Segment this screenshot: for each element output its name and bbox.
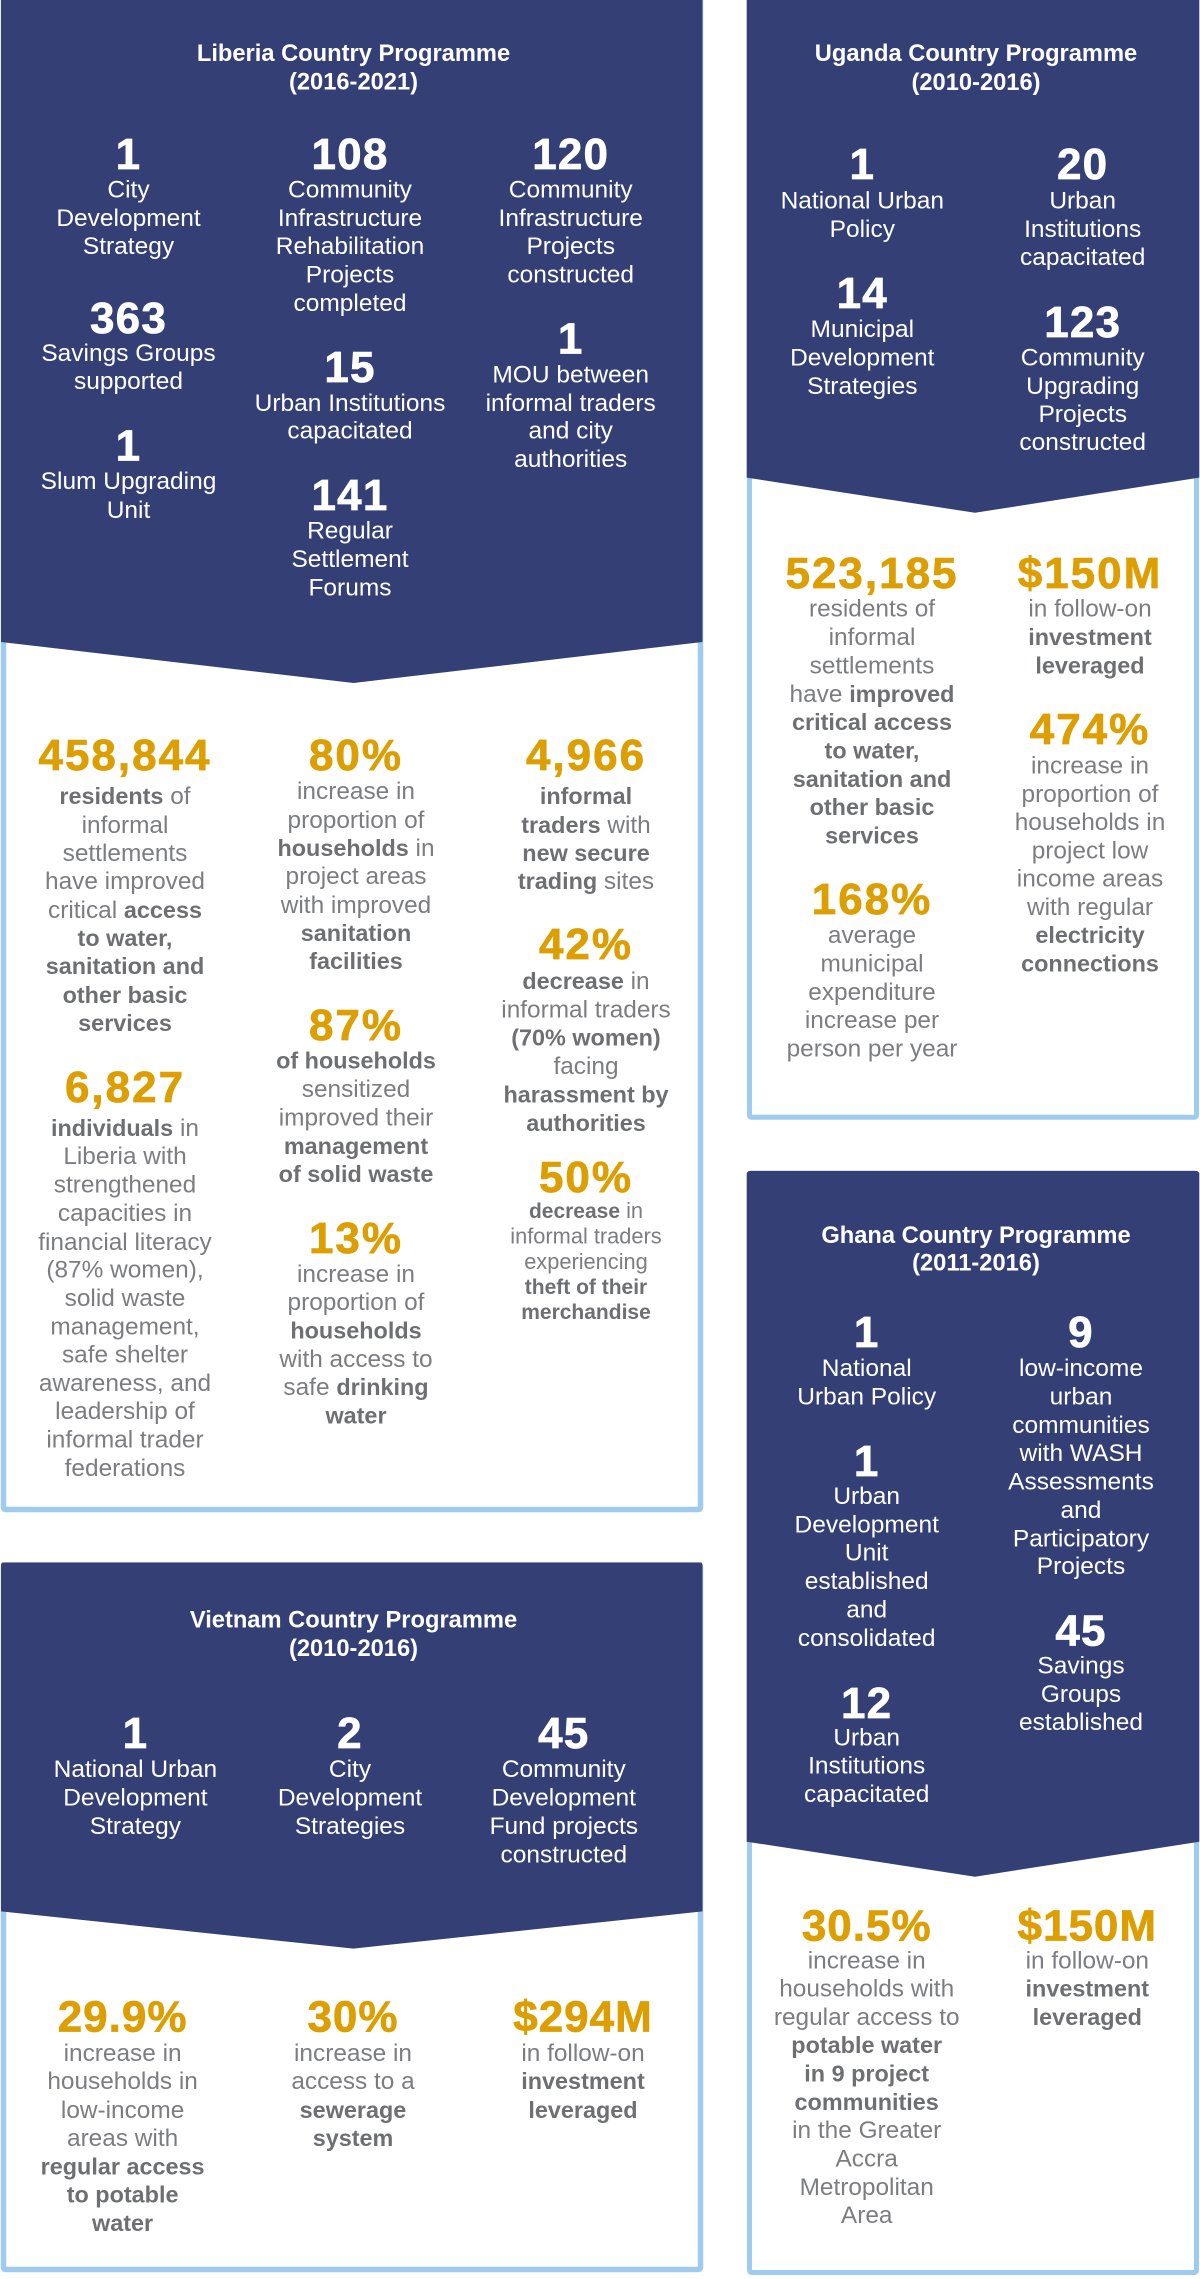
output: 1 MOU	[486, 314, 656, 473]
output: 108 rehabilitation projects: Rehabilitation	[276, 233, 424, 260]
result: 87% solid waste: sensitized	[302, 1076, 410, 1103]
result: 458,844 residents: services	[78, 1010, 172, 1036]
result: 6,827 individuals: capacities in	[58, 1200, 192, 1227]
result: 458,844 residents: 458,844	[38, 731, 212, 780]
output: 123 Community Upgrading Projects: Upgrading	[1026, 373, 1139, 400]
output: 363 Savings Groups: 363	[90, 294, 167, 343]
output: 1 National Urban Policy: National Urban	[781, 188, 944, 215]
output: 14 Municipal Development Strategies: Development	[790, 344, 935, 372]
result: 4,966 informal traders: new secure	[522, 840, 650, 866]
panel outline	[750, 0, 1196, 1117]
output: 1 Urban Development Unit: consolidated	[798, 1625, 935, 1652]
result: 168% municipal expenditure: municipal	[820, 951, 924, 978]
result: 87% solid waste: 87%	[309, 1001, 403, 1050]
result: 6,827 individuals: federations	[65, 1455, 185, 1482]
result: 30.5% potable water: communities	[795, 2089, 939, 2115]
result: 13% drinking water: water	[324, 1402, 387, 1428]
output: 1 City Development Strategy	[56, 130, 201, 260]
result: 4,966 informal traders: 4,966	[526, 731, 646, 780]
output: 45 Savings Groups: established	[1019, 1709, 1143, 1736]
result: $150M investment: leveraged	[1035, 653, 1145, 679]
output: 20 Urban Institutions: Urban	[1049, 188, 1116, 215]
result: 50% decrease theft: 50%	[539, 1153, 633, 1202]
result: 29.9% potable water: areas with	[67, 2125, 178, 2152]
output: 9 low-income urban communities: with WASH	[1019, 1440, 1142, 1467]
output: 120 infrastructure projects: Projects	[526, 233, 615, 260]
result: 30% sewerage	[291, 1993, 415, 2151]
result: 30.5% potable water: Metropolitan	[800, 2174, 934, 2201]
heading: Ghana: (2011-2016)	[912, 1250, 1040, 1276]
result: 13% drinking water: households	[290, 1318, 422, 1344]
output: 1 MOU: MOU between	[492, 362, 649, 388]
result: 523,185 residents: 523,185	[785, 549, 959, 598]
output: 1 Urban Development Unit: Development	[795, 1512, 939, 1539]
result: 474% electricity: 474%	[1030, 705, 1150, 754]
result: 29.9% potable water: households in	[47, 2068, 198, 2095]
result: 168% municipal expenditure: person per year	[787, 1036, 957, 1063]
output: 1 City Development Strategy: City	[107, 176, 150, 204]
output: 12 Urban Institutions: Urban	[833, 1724, 900, 1752]
output: 9 low-income urban communities: urban	[1050, 1384, 1112, 1410]
output: 120 infrastructure projects: Infrastructure	[499, 205, 643, 232]
result: 50% decrease theft: theft of their	[525, 1276, 647, 1299]
output: 12 Urban Institutions: 12	[841, 1679, 892, 1728]
output: 1 City Development Strategy: Strategy	[83, 233, 175, 260]
output: 1 Urban Development Unit	[795, 1437, 939, 1652]
result: 80% sanitation: sanitation	[301, 920, 411, 946]
result: 30.5% potable water: 30.5%	[802, 1901, 932, 1950]
output: 1 National Urban Development Strategy: 1	[123, 1709, 148, 1758]
output: 15 Urban Institutions: 15	[324, 343, 376, 392]
output: 108 rehabilitation projects: completed	[293, 290, 407, 317]
output: 108 rehabilitation projects: 108	[311, 130, 389, 179]
output: 45 Savings Groups	[1019, 1606, 1143, 1736]
output: 12 Urban Institutions: Institutions	[808, 1753, 925, 1780]
result: 6,827 individuals: awareness, and	[39, 1370, 211, 1397]
result: 458,844 residents: residents of	[59, 783, 191, 810]
header banner: Vietnam	[1, 1562, 702, 1949]
output: 1 Slum Upgrading Unit: Slum Upgrading	[41, 468, 216, 495]
output: 120 infrastructure projects: Community	[509, 176, 633, 204]
result: $150M investment: investment	[1028, 624, 1152, 650]
result: 458,844 residents	[38, 731, 212, 1036]
result: 6,827 individuals: Liberia with	[63, 1143, 187, 1170]
output: 9 low-income urban communities: Participatory	[1013, 1525, 1150, 1552]
heading: Ghana	[821, 1223, 1131, 1276]
result: 474% electricity: electricity	[1035, 922, 1145, 948]
output: 141 Regular Settlement Forums: 141	[311, 471, 389, 520]
result: 523,185 residents	[785, 549, 959, 848]
heading: Vietnam	[190, 1608, 517, 1662]
result: 474% electricity: project low	[1032, 837, 1149, 864]
heading: Vietnam: Vietnam Country Programme	[190, 1608, 517, 1634]
heading: Uganda: Uganda Country Programme	[815, 41, 1137, 67]
result: 474% electricity: households in	[1015, 809, 1165, 836]
output: 123 Community Upgrading Projects	[1019, 298, 1146, 456]
output: 1 National Urban Development Strategy	[54, 1709, 217, 1840]
output: 45 Community Development Fund projects	[490, 1709, 638, 1868]
result: 6,827 individuals: 6,827	[65, 1063, 185, 1112]
output: 20 Urban Institutions	[1020, 140, 1145, 271]
result: 87% solid waste: of households	[276, 1048, 436, 1074]
result: 6,827 individuals: strengthened	[54, 1172, 196, 1199]
result: 168% municipal expenditure: 168%	[812, 875, 932, 924]
result: 458,844 residents: other basic	[63, 982, 187, 1008]
result: 80% sanitation: with improved	[280, 892, 431, 919]
result: 523,185 residents: critical access	[792, 709, 952, 735]
result: 30% sewerage: increase in	[294, 2040, 412, 2067]
output: 1 Urban Development Unit: Urban	[833, 1483, 900, 1510]
output: 123 Community Upgrading Projects: Community	[1021, 344, 1145, 372]
result: 6,827 individuals: safe shelter	[62, 1342, 188, 1369]
output: 45 Savings Groups: Savings	[1037, 1653, 1125, 1680]
result: $150M investment	[1018, 1901, 1157, 2030]
result: 13% drinking water: proportion of	[288, 1289, 425, 1316]
output: 45 Savings Groups: 45	[1055, 1606, 1107, 1656]
output: 1 National Urban Policy: 1	[849, 140, 875, 189]
output: 363 Savings Groups: supported	[74, 368, 183, 395]
result: 50% decrease theft	[510, 1153, 662, 1324]
result: 29.9% potable water: water	[91, 2210, 153, 2236]
result: 50% decrease theft: experiencing	[524, 1249, 648, 1274]
output: 14 Municipal Development Strategies: 14	[837, 269, 888, 318]
heading: Liberia: Liberia Country Programme	[197, 41, 510, 67]
output: 1 National Urban Development Strategy: National Urban	[54, 1756, 217, 1783]
output: 1 Urban Development Unit: established	[805, 1568, 929, 1595]
result: 6,827 individuals: solid waste	[65, 1285, 185, 1312]
output: 1 City Development Strategy: 1	[116, 130, 141, 179]
result: 87% solid waste	[276, 1001, 436, 1187]
panel outline	[4, 0, 700, 1510]
output: 45 Savings Groups: Groups	[1041, 1681, 1121, 1708]
result: $150M investment: investment	[1026, 1976, 1149, 2002]
output: 1 MOU: 1	[558, 314, 584, 364]
output: 15 Urban Institutions: capacitated	[287, 418, 413, 444]
output: 9 low-income urban communities	[1008, 1308, 1154, 1580]
result: $150M investment: leveraged	[1033, 2004, 1142, 2030]
result: 29.9% potable water: low-income	[61, 2097, 184, 2124]
result: 168% municipal expenditure	[787, 875, 957, 1063]
output: 20 Urban Institutions: 20	[1057, 140, 1108, 189]
result: 42% decrease harassment: harassment by	[503, 1082, 669, 1108]
result: 80% sanitation: proportion of	[288, 807, 425, 834]
result: 29.9% potable water: increase in	[64, 2040, 182, 2067]
output: 14 Municipal Development Strategies: Strategies	[807, 373, 917, 400]
result: 4,966 informal traders: traders with	[521, 812, 651, 839]
output: 123 Community Upgrading Projects: 123	[1044, 298, 1121, 347]
result: 6,827 individuals: financial literacy	[38, 1229, 213, 1256]
result: 80% sanitation: 80%	[309, 731, 403, 780]
result: 474% electricity: proportion of	[1022, 781, 1159, 808]
result: 42% decrease harassment: decrease in	[522, 968, 650, 995]
output: 141 Regular Settlement Forums: Regular	[307, 518, 393, 544]
panel: Liberia Country Programme	[1, 0, 702, 1510]
result: 458,844 residents: informal	[82, 812, 168, 839]
result: 474% electricity: increase in	[1031, 752, 1149, 779]
output: 2 City Development Strategies: City	[329, 1756, 372, 1783]
output: 123 Community Upgrading Projects: Projects	[1038, 401, 1127, 428]
output: 1 National Urban Policy: Policy	[830, 216, 896, 243]
result: 30% sewerage: sewerage	[300, 2097, 406, 2123]
output: 1 National Urban Policy	[781, 140, 944, 243]
panel: Vietnam Country Programme	[1, 1562, 702, 2270]
result: 42% decrease harassment	[501, 920, 671, 1136]
output: 20 Urban Institutions: Institutions	[1024, 216, 1141, 243]
output: 1 MOU: authorities	[514, 446, 627, 473]
output: 45 Community Development Fund projects: Community	[502, 1756, 626, 1783]
result: 4,966 informal traders: trading sites	[518, 868, 654, 895]
result: 87% solid waste: improved their	[279, 1105, 433, 1132]
output: 1 MOU: informal traders	[486, 390, 656, 417]
result: 13% drinking water: 13%	[309, 1214, 403, 1263]
output: 120 infrastructure projects: constructed	[507, 262, 634, 288]
result: 80% sanitation: increase in	[297, 778, 415, 805]
result: $150M investment: in follow-on	[1026, 1947, 1149, 1974]
output: 9 low-income urban communities: Assessments	[1008, 1469, 1154, 1496]
result: $150M investment	[1018, 549, 1162, 679]
result: 4,966 informal traders: informal	[540, 783, 632, 809]
result: 458,844 residents: critical access	[48, 897, 202, 924]
output: 1 National Urban Policy: 1	[854, 1308, 880, 1357]
result: 30.5% potable water: potable water	[791, 2032, 942, 2058]
result: 42% decrease harassment: (70% women)	[511, 1025, 661, 1051]
output: 363 Savings Groups: Savings Groups	[41, 340, 216, 367]
result: 523,185 residents: residents of	[809, 596, 935, 622]
output: 45 Community Development Fund projects: Fund projects	[490, 1813, 638, 1840]
output: 2 City Development Strategies: 2	[337, 1709, 363, 1758]
heading: Ghana: Ghana Country Programme	[821, 1223, 1131, 1249]
result: 29.9% potable water: to potable	[67, 2182, 178, 2208]
output: 9 low-income urban communities: communities	[1012, 1412, 1150, 1439]
result: 50% decrease theft: decrease in	[529, 1198, 643, 1223]
result: 87% solid waste: of solid waste	[279, 1161, 433, 1187]
result: $150M investment: in follow-on	[1028, 596, 1152, 622]
result: 30% sewerage: 30%	[307, 1993, 399, 2042]
output: 15 Urban Institutions	[255, 343, 445, 444]
output: 1 National Urban Policy: National	[822, 1355, 912, 1382]
header banner: Uganda	[747, 0, 1199, 513]
result: 168% municipal expenditure: expenditure	[808, 979, 936, 1006]
result: 30.5% potable water: in the Greater	[792, 2117, 941, 2144]
result: 42% decrease harassment: informal traders	[501, 997, 671, 1024]
result: 6,827 individuals: individuals in	[51, 1115, 199, 1142]
result: 80% sanitation: facilities	[309, 948, 403, 974]
result: 523,185 residents: have improved	[790, 681, 954, 708]
output: 1 Urban Development Unit: Unit	[845, 1540, 889, 1567]
result: 30.5% potable water: in 9 project	[804, 2061, 929, 2087]
output: 120 infrastructure projects	[499, 130, 643, 288]
panel: Uganda Country Programme	[747, 0, 1199, 1117]
result: 42% decrease harassment: 42%	[539, 920, 633, 969]
result: 42% decrease harassment: authorities	[526, 1110, 646, 1136]
result: 474% electricity: connections	[1021, 950, 1159, 976]
heading: Uganda	[815, 41, 1137, 96]
output: 141 Regular Settlement Forums: Forums	[308, 574, 392, 602]
result: 29.9% potable water: 29.9%	[58, 1993, 187, 2042]
output: 1 Urban Development Unit: 1	[854, 1437, 880, 1486]
output: 1 National Urban Policy	[797, 1308, 937, 1410]
heading: Uganda: (2010-2016)	[911, 70, 1041, 96]
output: 123 Community Upgrading Projects: constructed	[1019, 429, 1146, 456]
result: 30.5% potable water: regular access to	[774, 2004, 960, 2031]
output: 45 Community Development Fund projects: Development	[492, 1784, 636, 1811]
output: 2 City Development Strategies: Development	[278, 1784, 422, 1811]
result: 87% solid waste: management	[284, 1133, 428, 1159]
output: 363 Savings Groups	[41, 294, 216, 395]
output: 108 rehabilitation projects: Infrastructure	[278, 205, 422, 232]
result: 6,827 individuals: (87% women),	[46, 1257, 204, 1284]
output: 1 National Urban Development Strategy: Development	[63, 1784, 208, 1811]
header banner: Liberia	[1, 0, 702, 683]
panel outline	[4, 1565, 700, 2270]
result: 523,185 residents: to water,	[825, 738, 919, 764]
result: 42% decrease harassment: facing	[553, 1053, 619, 1080]
result: 474% electricity: income areas	[1017, 866, 1163, 893]
result: 80% sanitation	[277, 731, 435, 974]
result: 523,185 residents: settlements	[810, 653, 934, 680]
output: 108 rehabilitation projects: Community	[288, 176, 413, 204]
result: $294M investment: in follow-on	[521, 2040, 645, 2067]
result: 30.5% potable water: households with	[779, 1976, 954, 2003]
result: 6,827 individuals: informal trader	[46, 1427, 204, 1454]
output: 108 rehabilitation projects	[276, 130, 424, 317]
header banner: Ghana	[747, 1171, 1199, 1877]
heading: Vietnam: (2010-2016)	[289, 1636, 418, 1662]
result: 80% sanitation: project areas	[286, 863, 426, 890]
result: 474% electricity	[1015, 705, 1165, 976]
output: 2 City Development Strategies: Strategies	[295, 1813, 405, 1840]
panel outline	[750, 1173, 1196, 2272]
output: 1 National Urban Development Strategy: Strategy	[90, 1813, 182, 1840]
result: $294M investment: investment	[521, 2068, 645, 2094]
result: 80% sanitation: households in	[277, 835, 435, 862]
output: 12 Urban Institutions: capacitated	[804, 1781, 929, 1808]
result: $150M investment: $150M	[1018, 1901, 1157, 1950]
output: 9 low-income urban communities: Projects	[1037, 1553, 1125, 1580]
output: 141 Regular Settlement Forums	[291, 471, 409, 602]
output: 141 Regular Settlement Forums: Settlement	[291, 546, 409, 573]
result: 523,185 residents: services	[825, 822, 919, 848]
output: 1 Slum Upgrading Unit	[41, 422, 216, 524]
result: 6,827 individuals: management,	[50, 1314, 200, 1341]
result: 30% sewerage: system	[313, 2125, 393, 2151]
output: 45 Community Development Fund projects: constructed	[500, 1841, 627, 1868]
output: 9 low-income urban communities: and	[1061, 1497, 1101, 1524]
result: 168% municipal expenditure: average	[828, 922, 916, 949]
result: $294M investment	[513, 1993, 653, 2123]
result: 458,844 residents: sanitation and	[46, 953, 204, 979]
output: 15 Urban Institutions: Urban Institutions	[255, 390, 445, 417]
heading: Liberia	[197, 41, 510, 96]
heading: Liberia: (2016-2021)	[289, 70, 418, 96]
result: 4,966 informal traders	[518, 731, 654, 895]
result: 13% drinking water	[278, 1214, 433, 1428]
result: 30.5% potable water: increase in	[808, 1947, 926, 1974]
output: 1 MOU: and city	[528, 418, 614, 444]
output: 9 low-income urban communities: low-income	[1019, 1355, 1143, 1382]
result: 6,827 individuals	[38, 1063, 213, 1482]
output: 1 City Development Strategy: Development	[56, 205, 201, 232]
result: 13% drinking water: increase in	[297, 1261, 415, 1288]
result: 50% decrease theft: merchandise	[521, 1301, 651, 1324]
result: $294M investment: leveraged	[528, 2097, 638, 2123]
panel: Ghana Country Programme	[747, 1171, 1199, 2272]
result: 458,844 residents: have improved	[45, 868, 205, 895]
result: 30.5% potable water	[774, 1901, 960, 2229]
output: 12 Urban Institutions	[804, 1679, 929, 1808]
result: 523,185 residents: sanitation and	[793, 766, 951, 792]
result: 50% decrease theft: informal traders	[510, 1224, 662, 1249]
result: 6,827 individuals: leadership of	[55, 1398, 195, 1425]
output: 14 Municipal Development Strategies	[790, 269, 935, 400]
output: 9 low-income urban communities: 9	[1068, 1308, 1094, 1357]
result: 30.5% potable water: Area	[841, 2202, 893, 2229]
output: 2 City Development Strategies	[278, 1709, 422, 1840]
result: 13% drinking water: safe drinking	[283, 1374, 429, 1401]
result: 30% sewerage: access to a	[291, 2068, 415, 2095]
result: 30.5% potable water: Accra	[836, 2146, 898, 2173]
result: $150M investment: $150M	[1018, 549, 1162, 598]
output: 14 Municipal Development Strategies: Municipal	[811, 316, 914, 343]
result: 474% electricity: with regular	[1026, 894, 1153, 921]
result: $294M investment: $294M	[513, 1993, 653, 2042]
result: 29.9% potable water: regular access	[41, 2153, 205, 2179]
output: 1 Slum Upgrading Unit: Unit	[107, 497, 150, 524]
output: 45 Community Development Fund projects: 45	[538, 1709, 589, 1758]
output: 1 National Urban Policy: Urban Policy	[797, 1384, 937, 1410]
output: 108 rehabilitation projects: Projects	[306, 262, 394, 288]
result: 523,185 residents: other basic	[810, 794, 934, 820]
output: 120 infrastructure projects: 120	[532, 130, 609, 179]
result: 458,844 residents: to water,	[78, 925, 172, 951]
result: 13% drinking water: with access to	[278, 1346, 433, 1373]
result: 458,844 residents: settlements	[63, 840, 187, 867]
result: 29.9% potable water	[41, 1993, 205, 2236]
result: 168% municipal expenditure: increase per	[805, 1007, 939, 1034]
output: 1 Urban Development Unit: and	[846, 1596, 887, 1623]
output: 20 Urban Institutions: capacitated	[1020, 244, 1145, 271]
result: 523,185 residents: informal	[829, 624, 915, 651]
output: 1 Slum Upgrading Unit: 1	[116, 422, 141, 470]
